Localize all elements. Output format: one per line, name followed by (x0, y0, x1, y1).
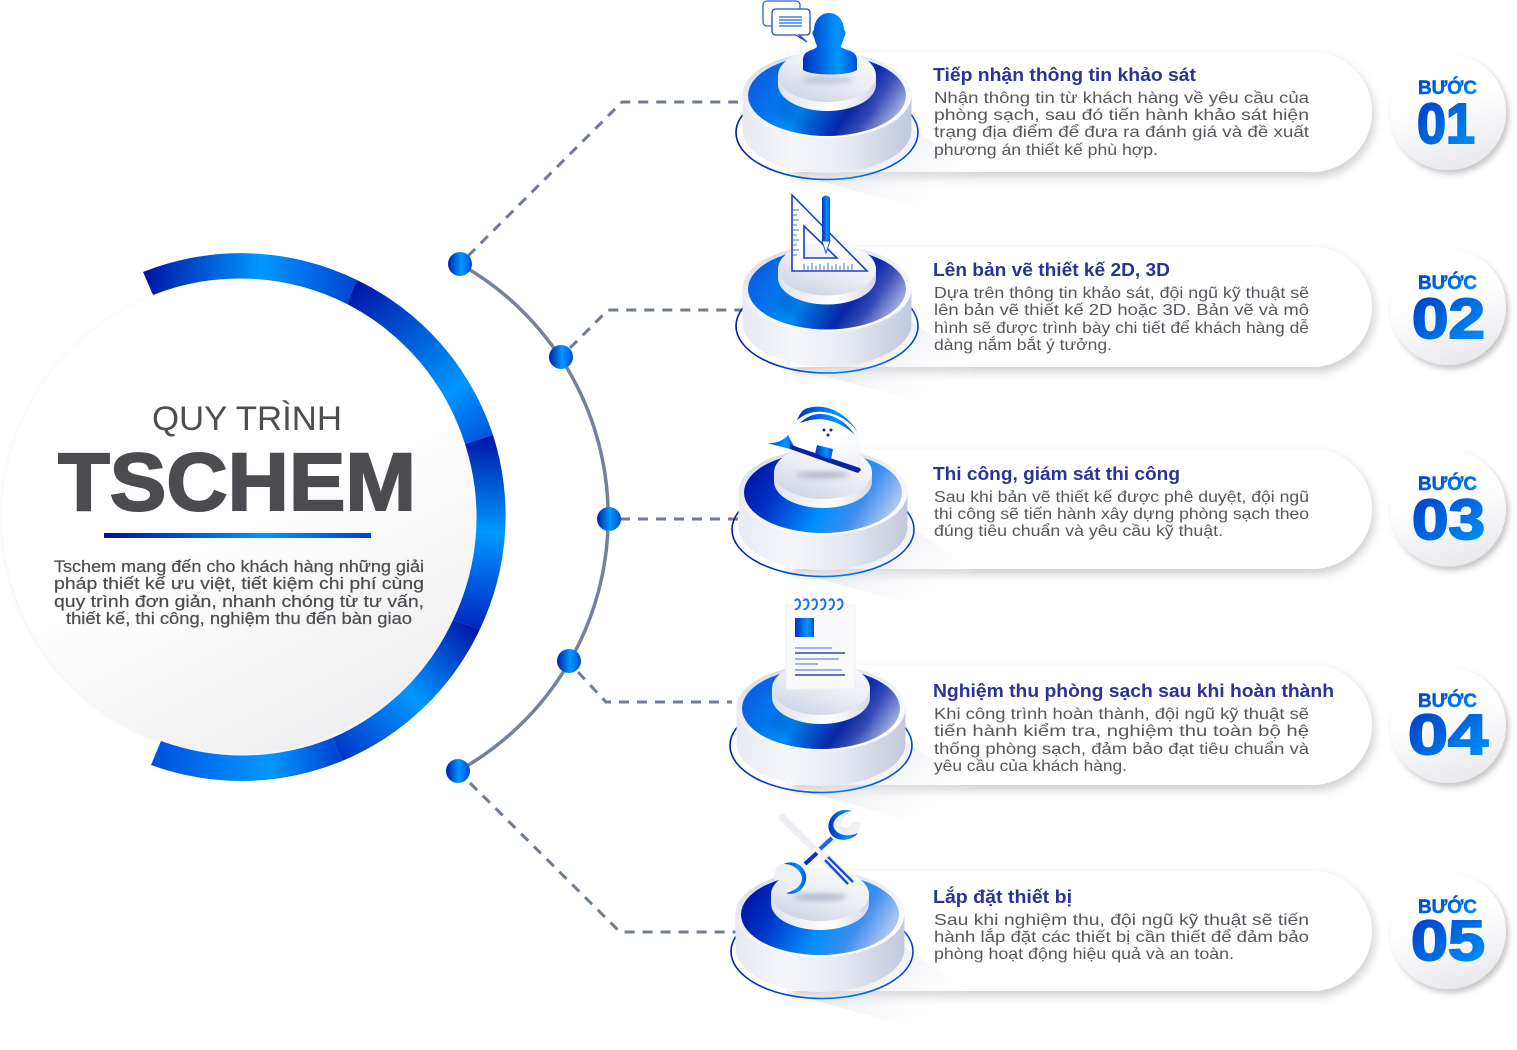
cast shadow (810, 944, 970, 1034)
badge: step 5: 05 (1411, 909, 1485, 973)
badge: step 3: 03 (1412, 488, 1485, 552)
step 1 description: phương án thiết kế phù hợp. (934, 142, 1158, 159)
badge: step 5: BƯỚC (1418, 896, 1477, 918)
intro text: Tschem mang đến cho khách hàng những giải (54, 558, 424, 576)
badge: step 2: 02 (1412, 287, 1485, 351)
step 4 description: thống phòng sạch, đảm bảo đạt tiêu chuẩn và (934, 740, 1309, 758)
step 4 description: yêu cầu của khách hàng. (934, 758, 1127, 775)
cast shadow (811, 738, 971, 828)
step 2 title: Lên bản vẽ thiết kế 2D, 3D (933, 260, 1170, 280)
step 4 description (934, 706, 1309, 775)
icon: notepad document (786, 599, 855, 689)
badge: step 3: BƯỚC (1418, 473, 1477, 495)
icon: set square and pencil (792, 195, 867, 271)
panel: main circle (2, 253, 506, 781)
badge: step 1 (1390, 54, 1506, 170)
cast shadow (817, 125, 977, 215)
podium 1 (736, 49, 918, 180)
podium 4 (730, 662, 912, 792)
step 5 description: phòng hoạt động hiệu quả và an toàn. (934, 946, 1234, 963)
panel: step 3 card (790, 449, 1372, 612)
icon: person with speech bubbles (763, 1, 857, 74)
step 2 description: Dựa trên thông tin khảo sát, đội ngũ kỹ thuật sẽ (934, 285, 1309, 302)
badge: step 1: 01 (1417, 92, 1475, 156)
panel: step 1 card (790, 52, 1372, 215)
step 4 title: Nghiệm thu phòng sạch sau khi hoàn thành (933, 681, 1334, 701)
badge: step 5 (1390, 873, 1506, 989)
segmented blue ring (143, 253, 506, 781)
podium 2 (736, 242, 918, 373)
intro text (54, 558, 424, 628)
step 5 title: Lắp đặt thiết bị (933, 886, 1072, 907)
step 1 description (934, 90, 1310, 159)
icon: wrench and screwdriver (774, 810, 861, 894)
step 1 title: Tiếp nhận thông tin khảo sát (933, 65, 1196, 85)
intro text: pháp thiết kế ưu việt, tiết kiệm chi phí cùng (54, 575, 424, 593)
step 3 description (934, 489, 1309, 540)
step 1 description: phòng sạch, sau đó tiến hành khảo sát hiện (934, 107, 1309, 124)
step 4 description: Khi công trình hoàn thành, đội ngũ kỹ thuật sẽ (934, 706, 1309, 723)
cast shadow (817, 318, 977, 408)
step 3 description: Sau khi bản vẽ thiết kế được phê duyệt, đội ngũ (934, 489, 1309, 506)
badge: step 2: BƯỚC (1418, 272, 1477, 294)
heading: QUY TRÌNH: QUY TRÌNH (152, 400, 342, 438)
panel: step 5 card (790, 871, 1372, 1034)
step 5 description: hành lắp đặt các thiết bị cần thiết để đảm bảo (934, 927, 1309, 946)
step 2 description: lên bản vẽ thiết kế 2D hoặc 3D. Bản vẽ và mô (934, 302, 1309, 319)
badge: step 1: BƯỚC (1418, 77, 1477, 99)
cast shadow (813, 522, 973, 612)
step 1 description: trạng địa điểm để đưa ra đánh giá và đề xuất (934, 123, 1310, 141)
step 5 description: Sau khi nghiệm thu, đội ngũ kỹ thuật sẽ tiến (934, 912, 1309, 929)
step 5 description (934, 912, 1309, 963)
timeline dots (446, 252, 621, 783)
step 1 description: Nhận thông tin từ khách hàng về yêu cầu của (934, 90, 1309, 107)
podium 5 (731, 868, 913, 998)
step 2 description (934, 285, 1309, 354)
badge: step 4 (1390, 667, 1506, 783)
step 3 description: đúng tiêu chuẩn và yêu cầu kỹ thuật. (934, 522, 1223, 540)
step 3 title: Thi công, giám sát thi công (933, 464, 1180, 484)
badge: step 2 (1390, 249, 1506, 365)
badge: step 3 (1390, 450, 1506, 566)
connector dashed lines (468, 102, 742, 932)
intro text: quy trình đơn giản, nhanh chóng từ tư vấn, (54, 593, 424, 611)
step 2 description: dàng nắm bắt ý tưởng. (934, 335, 1112, 354)
podium 3 (732, 446, 914, 576)
heading: TSCHEM: TSCHEM (58, 437, 416, 528)
white disc (2, 280, 476, 754)
timeline arc (458, 264, 608, 771)
step 2 description: hình sẽ được trình bày chi tiết để khách hàng dễ (934, 318, 1309, 337)
badge: step 4: 04 (1408, 703, 1488, 767)
step 3 description: thi công sẽ tiến hành xây dựng phòng sạch theo (934, 506, 1309, 523)
step 4 description: tiến hành kiểm tra, nghiệm thu toàn bộ hệ (934, 722, 1309, 740)
panel: step 2 card (790, 247, 1372, 408)
badge: step 4: BƯỚC (1418, 690, 1477, 712)
icon: hard hat (767, 407, 861, 473)
heading underline (104, 533, 371, 538)
intro text: thiết kế, thi công, nghiệm thu đến bàn giao (66, 610, 412, 628)
panel: step 4 card (790, 665, 1372, 828)
